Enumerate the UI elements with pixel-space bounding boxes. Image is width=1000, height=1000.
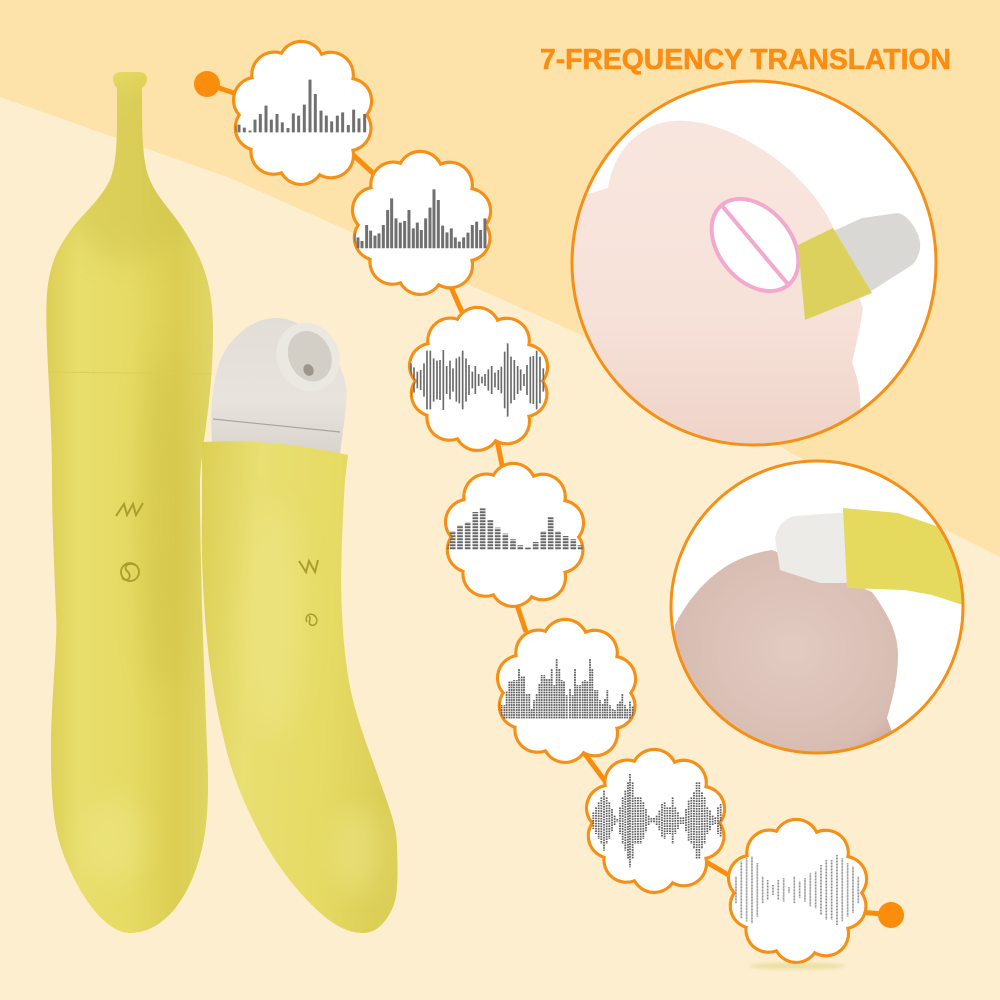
panel: upper usage circle: [560, 81, 936, 470]
frequency cloud 7: [729, 819, 867, 962]
icon: mode button, suction banana: [306, 614, 317, 625]
shadow below last cloud: [749, 962, 845, 970]
frequency cloud 6: [587, 749, 725, 892]
frequency cloud 1: [234, 41, 372, 184]
frequency cloud 2: [353, 151, 491, 294]
soft form: [674, 550, 898, 752]
frequency cloud 5: [498, 619, 636, 762]
product: suction banana: [202, 312, 398, 933]
icon: wave button, suction banana: [299, 560, 318, 572]
icon: wave button: [116, 503, 143, 516]
suction head: [211, 312, 351, 455]
panel: lower usage circle: [660, 461, 966, 770]
frequency cloud 4: [446, 463, 584, 606]
soft form: [574, 120, 863, 444]
product tip: [798, 213, 920, 320]
connector line with end dots: [194, 71, 904, 928]
icon: mode button, large banana: [121, 563, 139, 581]
suction ring: [265, 312, 351, 402]
pink oval marker: [710, 196, 800, 294]
product tip: [775, 508, 966, 606]
frequency cloud 3: [410, 307, 548, 450]
product: large banana: [46, 72, 213, 933]
title: 7-FREQUENCY TRANSLATION: [540, 44, 951, 76]
